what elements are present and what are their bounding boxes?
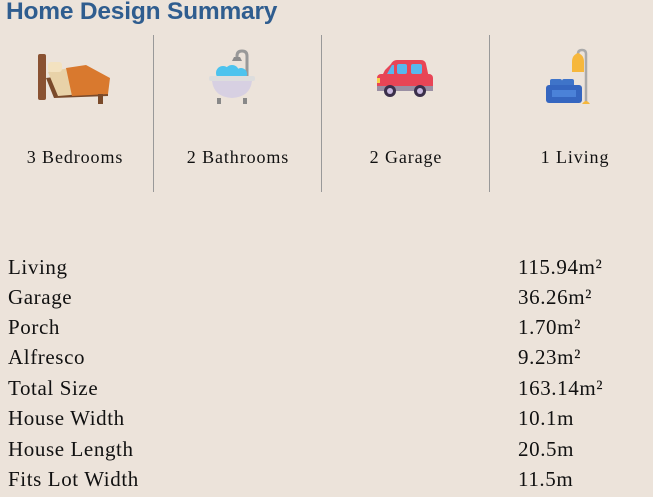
row: total size: 163.14m²: [518, 376, 603, 400]
row: living: [8, 255, 602, 279]
row: total size: Total Size: [8, 376, 98, 400]
row: garage: [8, 285, 592, 309]
row: house width: 10.1m: [518, 406, 574, 430]
row: house width: [8, 406, 574, 430]
row: porch: [8, 315, 581, 339]
row: living: 115.94m²: [518, 255, 602, 279]
icon: car: [377, 60, 433, 97]
icon: bathtub: [209, 50, 255, 104]
row: alfresco: Alfresco: [8, 345, 85, 369]
table: areas and dimensions: [8, 255, 603, 491]
row: garage: 36.26m²: [518, 285, 592, 309]
row: lot width: 11.5m: [518, 467, 573, 491]
row: house length: 20.5m: [518, 437, 574, 461]
label: garage: 2 Garage: [370, 147, 442, 167]
row: house width: House Width: [8, 406, 125, 430]
row: lot width: [8, 467, 573, 491]
label: living: 1 Living: [541, 147, 609, 167]
row: house length: [8, 437, 574, 461]
row: total size: [8, 376, 603, 400]
label: bathrooms: 2 Bathrooms: [187, 147, 289, 167]
row: lot width: Fits Lot Width: [8, 467, 139, 491]
icon: bed: [38, 54, 110, 104]
row: porch: 1.70m²: [518, 315, 581, 339]
label: bedrooms: 3 Bedrooms: [27, 147, 123, 167]
row: alfresco: [8, 345, 581, 369]
row: porch: Porch: [8, 315, 60, 339]
icon: sofa and lamp: [546, 48, 590, 104]
row: house length: House Length: [8, 437, 134, 461]
row: living: Living: [8, 255, 68, 279]
row: alfresco: 9.23m²: [518, 345, 581, 369]
row: garage: Garage: [8, 285, 72, 309]
